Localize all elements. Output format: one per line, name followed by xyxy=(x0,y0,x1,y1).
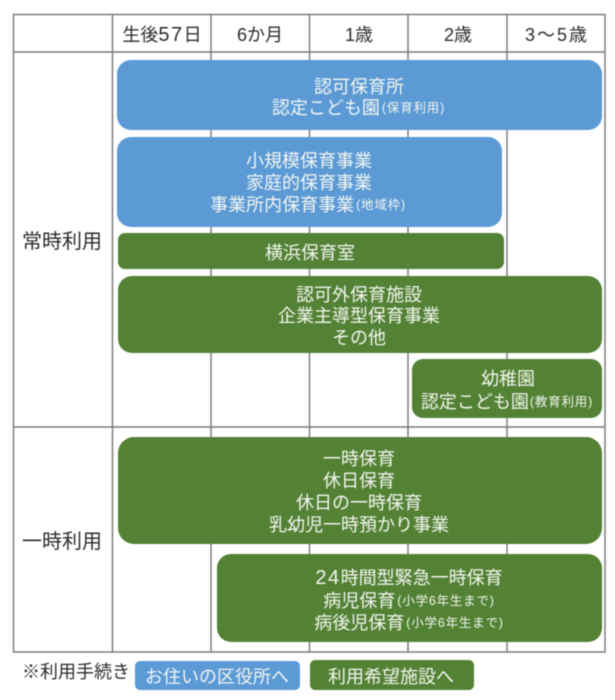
bar: temporary care: 乳幼児一時預かり事業 xyxy=(269,515,449,535)
bar: unlicensed nursery: その他 xyxy=(332,328,386,348)
header row: age columns xyxy=(122,24,587,46)
legend label: ※利用手続き xyxy=(22,662,130,682)
bar: licensed nursery: 認可保育所 xyxy=(314,77,404,97)
legend: ward office xyxy=(135,661,300,690)
bar: temporary care: 一時保育 xyxy=(323,449,395,469)
row label: regular use: 常時利用 xyxy=(22,230,102,253)
bar: 24-hour and sick child care: 病後児保育(小学6年生まで) xyxy=(314,613,504,633)
bar: Yokohama nursery room: 横浜保育室 xyxy=(265,243,355,263)
legend: desired facility xyxy=(310,660,474,690)
bar: Yokohama nursery room xyxy=(118,233,504,269)
legend: ward office: お住いの区役所へ xyxy=(145,667,289,687)
bar: licensed nursery xyxy=(117,60,602,130)
header row: age columns: 1歳 xyxy=(345,25,373,45)
bar: unlicensed nursery: 認可外保育施設 xyxy=(296,285,422,305)
legend: desired facility: 利用希望施設へ xyxy=(328,667,454,687)
header row: age columns: 6か月 xyxy=(237,25,283,45)
bar: kindergarten: 幼稚園 xyxy=(481,369,535,389)
bar: temporary care: 休日保育 xyxy=(323,471,395,491)
bar: small-scale nursery: 小規模保育事業 xyxy=(246,151,372,171)
bar: unlicensed nursery: 企業主導型保育事業 xyxy=(278,306,440,326)
bar: kindergarten xyxy=(412,359,602,418)
bar: small-scale nursery: 事業所内保育事業(地域枠) xyxy=(210,195,406,215)
row label: temporary use: 一時利用 xyxy=(22,530,102,553)
header row: age columns: 生後57日 xyxy=(122,24,202,46)
bar: small-scale nursery xyxy=(117,137,502,227)
bar: 24-hour and sick child care xyxy=(217,554,602,642)
bar: 24-hour and sick child care: 24時間型緊急一時保育 xyxy=(315,567,503,589)
bar: temporary care xyxy=(118,437,602,544)
bar: kindergarten: 認定こども園(教育利用) xyxy=(421,392,593,412)
bar: small-scale nursery: 家庭的保育事業 xyxy=(246,173,372,193)
bar: 24-hour and sick child care: 病児保育(小学6年生まで) xyxy=(323,591,495,611)
bar: unlicensed nursery xyxy=(118,276,602,353)
header row: age columns: 2歳 xyxy=(444,25,472,45)
bar: temporary care: 休日の一時保育 xyxy=(296,493,422,513)
header row: age columns: 3～5歳 xyxy=(525,25,587,45)
bar: licensed nursery: 認定こども園(保育利用) xyxy=(272,98,445,118)
